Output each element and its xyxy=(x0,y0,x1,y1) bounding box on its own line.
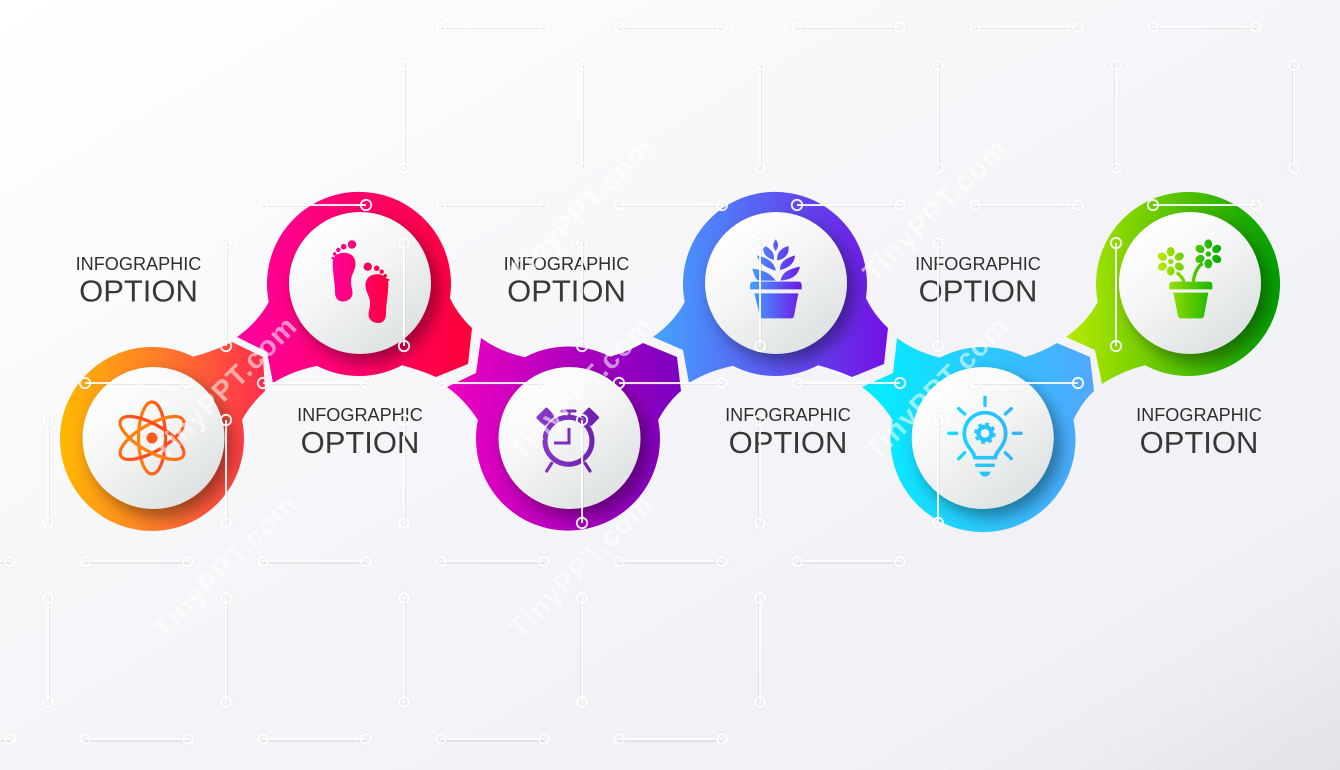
step 1: orange atom xyxy=(60,342,265,531)
label 4: infographic option: OPTION xyxy=(729,425,847,460)
shape: pink speech circle xyxy=(237,192,472,383)
icon: flowers in pot xyxy=(1156,239,1223,318)
label 2: infographic option: INFOGRAPHIC xyxy=(297,405,423,425)
label 3: infographic option xyxy=(504,254,629,308)
watermarks: TinyPPT.com xyxy=(503,132,660,289)
watermarks: TinyPPT.com xyxy=(857,132,1014,289)
disc: white circle with shadow xyxy=(705,212,847,354)
label 2: infographic option: OPTION xyxy=(301,425,419,460)
disc: white circle with shadow xyxy=(82,367,224,509)
label 2: infographic option xyxy=(297,405,423,460)
watermarks: TinyPPT.com xyxy=(147,488,304,645)
label 5: infographic option: INFOGRAPHIC xyxy=(915,254,1041,274)
label 6: infographic option: OPTION xyxy=(1140,425,1258,460)
shape: blue-violet speech circle xyxy=(653,192,888,383)
label 1: infographic option: INFOGRAPHIC xyxy=(76,254,201,274)
step 3: magenta alarm clock xyxy=(447,338,681,531)
icon: footprints xyxy=(331,240,389,323)
label 6: infographic option xyxy=(1136,405,1262,460)
shape: orange speech circle xyxy=(60,342,265,531)
watermarks: TinyPPT.com xyxy=(503,488,660,645)
watermarks: TinyPPT.com xyxy=(147,310,304,467)
icon: potted succulent xyxy=(750,239,802,318)
step 4: blue-violet plant xyxy=(653,192,888,383)
shape: magenta speech circle xyxy=(447,338,681,531)
label 4: infographic option xyxy=(725,405,851,460)
step 2: pink footprints xyxy=(237,192,472,383)
label 4: infographic option: INFOGRAPHIC xyxy=(725,405,851,425)
label 3: infographic option: INFOGRAPHIC xyxy=(504,254,629,274)
watermarks: TinyPPT.com xyxy=(859,310,1016,467)
icon: atom xyxy=(114,402,190,474)
label 5: infographic option xyxy=(915,254,1041,308)
shape: cyan speech circle xyxy=(862,338,1094,532)
watermarks: TinyPPT.com xyxy=(503,310,660,467)
label 1: infographic option: OPTION xyxy=(79,274,198,308)
label 1: infographic option xyxy=(76,254,201,308)
label 6: infographic option: INFOGRAPHIC xyxy=(1136,405,1262,425)
step 5: cyan light bulb xyxy=(862,338,1094,532)
disc: white circle with shadow xyxy=(498,367,640,509)
disc: white circle with shadow xyxy=(289,212,431,354)
step 6: green flower pot xyxy=(1066,192,1280,384)
watermarks xyxy=(147,132,1016,645)
label 3: infographic option: OPTION xyxy=(507,274,626,308)
shape: green speech circle xyxy=(1066,192,1280,384)
disc: white circle with shadow xyxy=(912,367,1054,509)
icon: alarm clock xyxy=(536,407,600,471)
disc: white circle with shadow xyxy=(1119,212,1261,354)
label 5: infographic option: OPTION xyxy=(919,274,1037,308)
icon: light bulb with gear xyxy=(949,397,1021,477)
